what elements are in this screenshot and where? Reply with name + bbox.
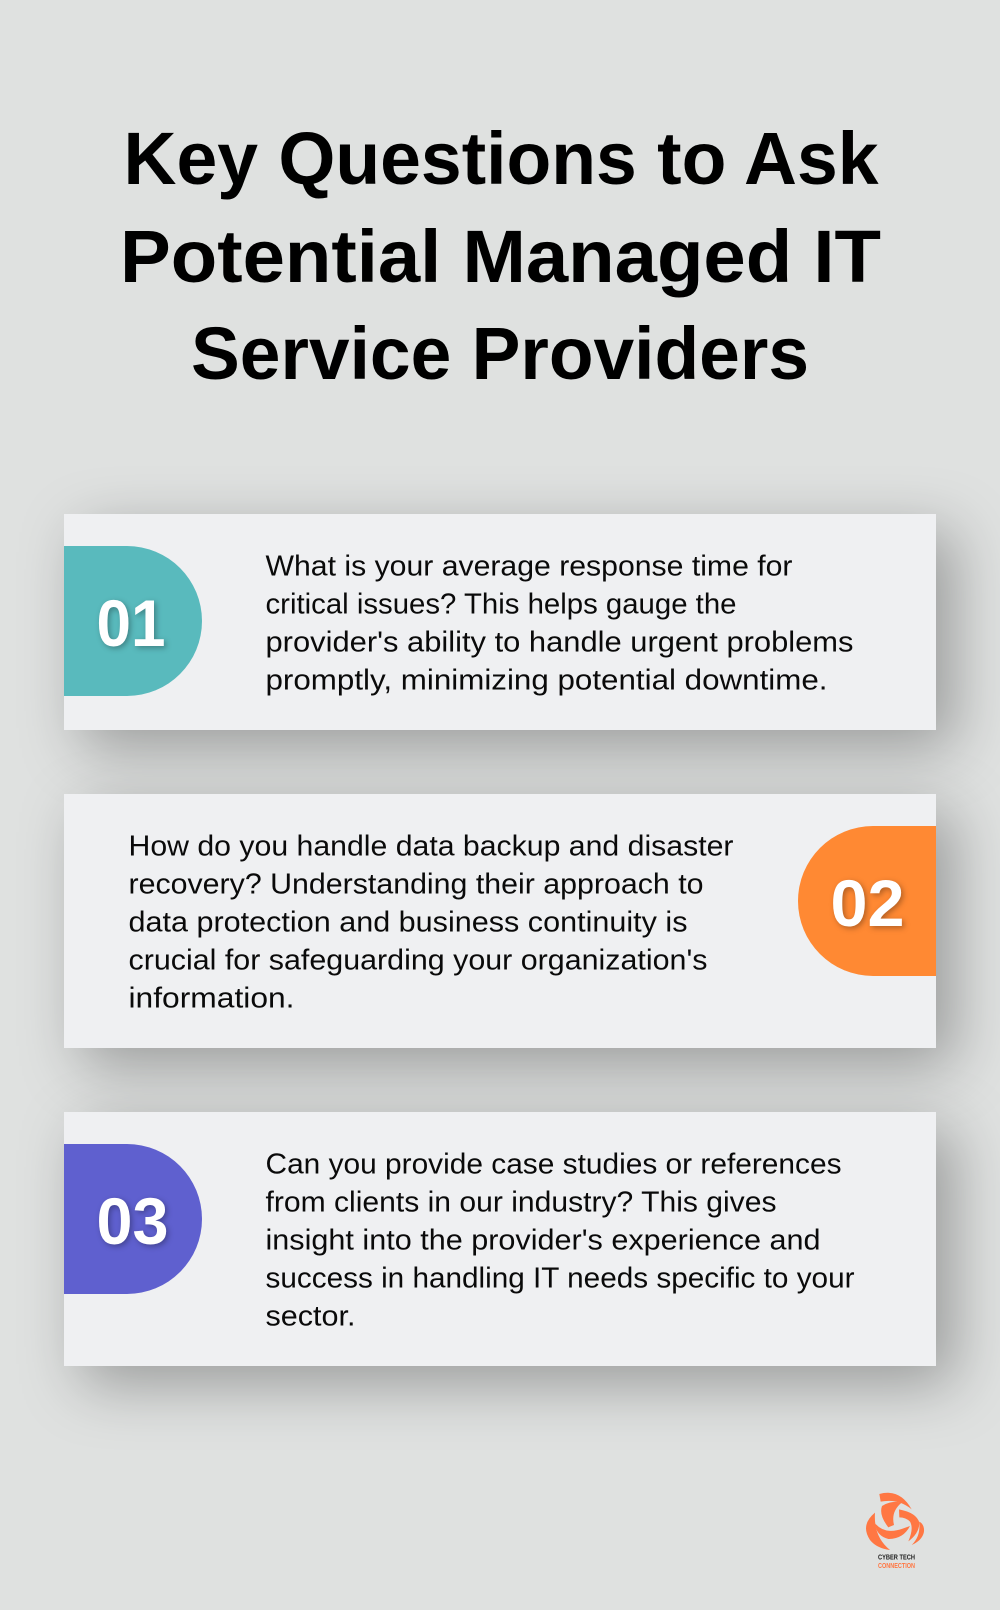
badge: 03: 03 [96, 1184, 168, 1258]
badge: 02: 02 [830, 866, 904, 940]
icon: company logo: CONNECTION [878, 1561, 915, 1570]
text: question 3: Can you provide case studies or references [266, 1149, 842, 1181]
text: question 2: How do you handle data backup and disaster [128, 831, 734, 863]
title: Key Questions to Ask [124, 117, 879, 200]
text: question 3: sector. [266, 1301, 356, 1333]
text: question 3: success in handling IT needs specific to your [266, 1263, 855, 1295]
text: question 3: insight into the provider's experience and [266, 1225, 820, 1257]
title: Potential Managed IT [120, 215, 881, 298]
text: question 2: information. [128, 983, 294, 1015]
text: question 1 [266, 551, 854, 697]
text: question 3: from clients in our industry? This gives [266, 1187, 776, 1219]
text: question 2: crucial for safeguarding your organization's [128, 945, 708, 977]
text: question 1: critical issues? This helps gauge the [266, 589, 736, 621]
panel: question 3 [64, 1112, 936, 1366]
panel: question 2 [64, 794, 936, 1048]
text: question 2 [128, 831, 734, 1015]
text: question 2: data protection and business continuity is [128, 907, 688, 939]
badge: 03 [64, 1144, 202, 1294]
text: question 3 [266, 1149, 855, 1333]
title: Service Providers [191, 312, 809, 395]
text: question 1: promptly, minimizing potential downtime. [266, 665, 828, 697]
badge: 01: 01 [96, 586, 166, 660]
panel: question 1 [64, 514, 936, 730]
text: question 1: provider's ability to handle urgent problems [266, 627, 854, 659]
text: question 2: recovery? Understanding their approach to [128, 869, 704, 901]
badge: 02 [798, 826, 936, 976]
text: question 1: What is your average response time for [266, 551, 793, 583]
title [120, 117, 881, 395]
icon: company logo [866, 1493, 924, 1570]
icon: company logo: CYBER TECH [878, 1552, 915, 1562]
badge: 01 [64, 546, 202, 696]
